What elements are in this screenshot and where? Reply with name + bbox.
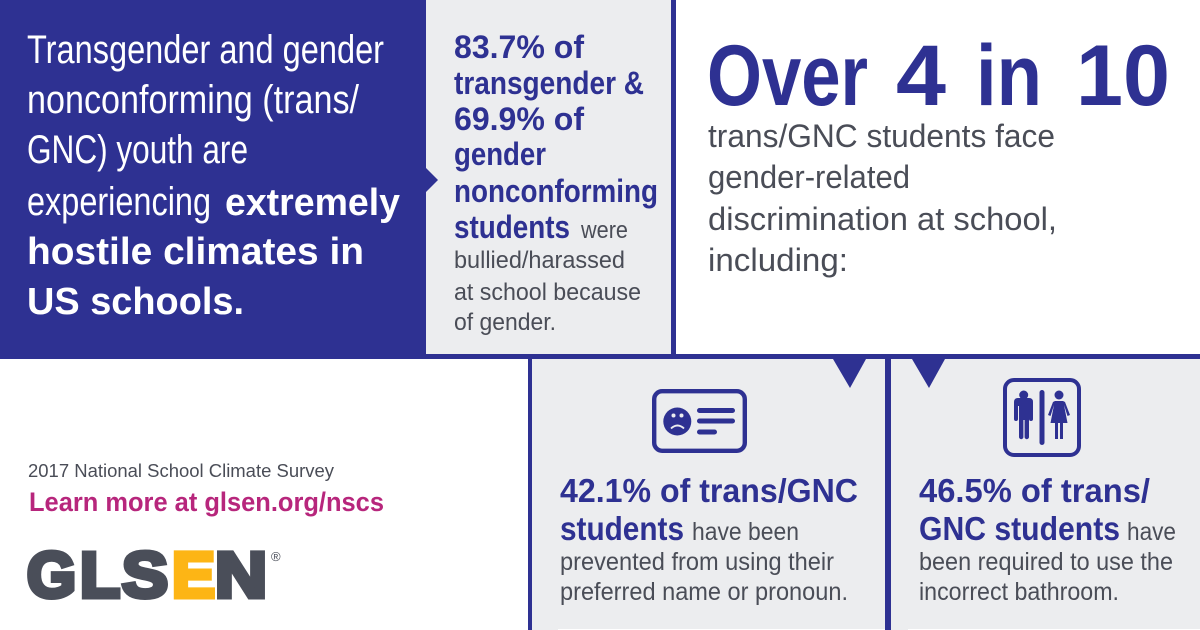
discrimination text bbox=[708, 118, 1057, 278]
bathroom text: incorrect bathroom. bbox=[919, 578, 1119, 606]
divider between cards bbox=[885, 359, 891, 630]
GLSEN logo bbox=[27, 539, 281, 611]
intro text bbox=[27, 28, 400, 323]
panel: bathroom card bbox=[891, 359, 1200, 630]
intro text: extremely bbox=[225, 182, 400, 224]
intro text: nonconforming (trans/ bbox=[27, 78, 360, 122]
GLSEN logo: E bbox=[172, 539, 215, 611]
discrimination text: gender-related bbox=[708, 159, 910, 195]
panel: intro statement bbox=[0, 0, 426, 358]
vertical divider bbox=[671, 0, 676, 358]
big number heading: in bbox=[976, 28, 1042, 124]
bathroom text: GNC students bbox=[919, 510, 1120, 547]
arrow: pointer up-left bbox=[912, 359, 945, 388]
horizontal divider bbox=[0, 354, 1200, 359]
big number heading: Over bbox=[707, 28, 868, 124]
bathroom text bbox=[919, 472, 1176, 606]
bullying text: bullied/harassed bbox=[454, 247, 625, 274]
big number heading: 10 bbox=[1076, 28, 1170, 124]
learn more link: Learn more at glsen.org/nscs bbox=[29, 487, 384, 517]
name and pronoun text: 42.1% of trans/GNC bbox=[560, 472, 858, 509]
GLSEN logo: S bbox=[122, 539, 168, 611]
GLSEN logo: ® bbox=[271, 549, 281, 564]
bullying text bbox=[454, 29, 658, 336]
panel: name and pronoun card bbox=[528, 359, 885, 630]
GLSEN logo: N bbox=[215, 539, 267, 611]
name and pronoun text: have been bbox=[692, 518, 799, 546]
arrow: pointer from intro panel bbox=[425, 167, 438, 193]
intro text: US schools. bbox=[27, 281, 244, 323]
discrimination text: trans/GNC students face bbox=[708, 118, 1055, 154]
panel: source and logo bbox=[27, 461, 384, 611]
icon: ID card with sad face bbox=[654, 391, 745, 451]
bullying text: 83.7% of bbox=[454, 29, 584, 65]
bathroom text: been required to use the bbox=[919, 548, 1173, 576]
name and pronoun text: prevented from using their bbox=[560, 548, 834, 576]
discrimination text: including: bbox=[708, 242, 848, 278]
survey name: 2017 National School Climate Survey bbox=[28, 461, 334, 481]
big number heading: 4 bbox=[896, 28, 946, 124]
icon: restroom sign bbox=[1005, 380, 1079, 455]
bullying text: students bbox=[454, 209, 570, 245]
intro text: GNC) youth are bbox=[27, 128, 248, 172]
bathroom text: have bbox=[1127, 518, 1176, 546]
bullying text: gender bbox=[454, 136, 546, 172]
GLSEN logo: G bbox=[27, 539, 76, 611]
bullying text: 69.9% of bbox=[454, 101, 584, 137]
bullying text: nonconforming bbox=[454, 173, 658, 209]
bullying text: transgender & bbox=[454, 65, 644, 101]
bullying text: at school because bbox=[454, 279, 641, 306]
bullying text: were bbox=[580, 217, 628, 244]
discrimination text: discrimination at school, bbox=[708, 201, 1057, 237]
panel: over 4 in 10 bbox=[707, 28, 1170, 278]
GLSEN logo: L bbox=[80, 539, 120, 611]
name and pronoun text bbox=[560, 472, 858, 606]
intro text: hostile climates in bbox=[27, 231, 364, 273]
intro text: Transgender and gender bbox=[27, 28, 384, 72]
intro text: experiencing bbox=[27, 180, 211, 224]
name and pronoun text: preferred name or pronoun. bbox=[560, 578, 848, 606]
name and pronoun text: students bbox=[560, 510, 684, 547]
bullying text: of gender. bbox=[454, 309, 556, 336]
panel: bullying statistic bbox=[425, 0, 671, 354]
arrow: pointer up-right bbox=[833, 359, 866, 388]
bathroom text: 46.5% of trans/ bbox=[919, 472, 1150, 509]
